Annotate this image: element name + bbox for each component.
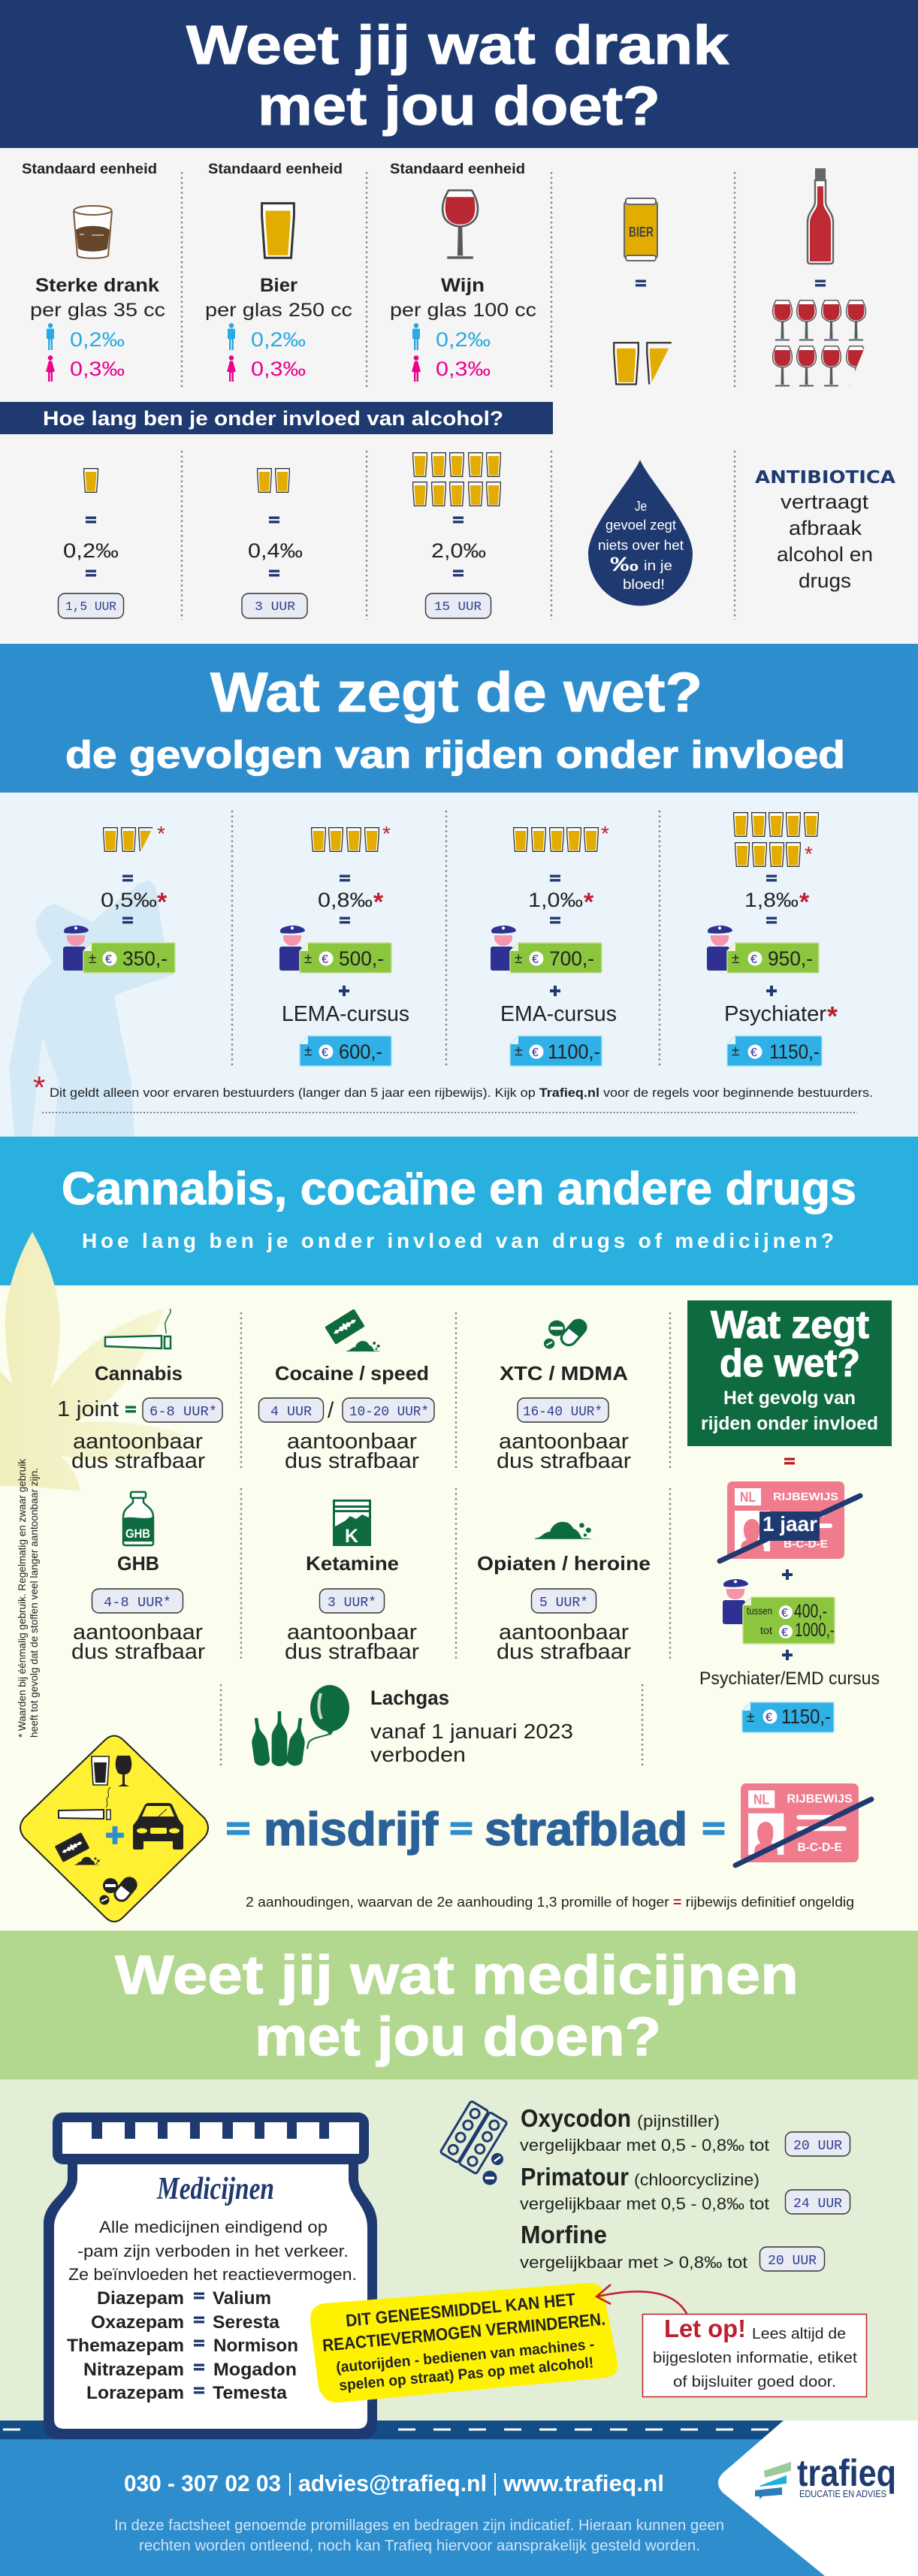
note: rotated footnote: [16, 1458, 40, 1738]
column: wijn: per glas 100 cc: [390, 300, 536, 321]
tag: 1150: ±: [747, 1710, 754, 1726]
arrow: red curved: [596, 2285, 690, 2321]
clock: 3 uur: 3 UUR: [255, 600, 295, 615]
item: ketamine: dus strafbaar: [285, 1640, 419, 1664]
tag: 1100: [510, 1036, 602, 1066]
item: opiaten heroine: dus strafbaar: [497, 1640, 631, 1664]
jar text: Valium: [213, 2288, 271, 2309]
callout: drop: ‰: [610, 553, 639, 575]
clock: 16-40 uur: 16-40 UUR*: [523, 1405, 602, 1420]
footnote: Dit geldt alleen voor ervaren bestuurders (langer dan 5 jaar een rijbewijs). Kijk op Trafieq.nl voor de regels voor beginnende bestuurders.: [50, 1086, 873, 1100]
text: antibiotica: drugs: [799, 569, 851, 592]
icon: shot glass: [74, 206, 112, 258]
footnote: *: [33, 1070, 45, 1105]
icon: woman: [412, 355, 421, 382]
column: 1,0 promille: *: [601, 822, 609, 845]
item: cannabis: dus strafbaar: [71, 1449, 205, 1473]
icon: officer with fine between 400 and 1000: tot: [760, 1624, 772, 1636]
item: xtc mdma: dus strafbaar: [497, 1449, 631, 1473]
panel: cannabis cocaine en andere drugs: [0, 1137, 918, 1931]
column: fles wijn: [773, 168, 865, 386]
icon: joint: [105, 1309, 171, 1348]
item: lachgas: vanaf 1 januari 2023: [370, 1720, 573, 1743]
contact line: 030 - 307 02 03: [124, 2470, 281, 2496]
panel: medicijnen: [0, 1931, 918, 2439]
icon: warning diamond: [20, 1735, 208, 1922]
clock: 24 uur: [786, 2190, 850, 2214]
contact line: [124, 2470, 664, 2496]
clock: 3 uur: [320, 1589, 385, 1613]
item: oxycodon: Oxycodon: [521, 2104, 631, 2132]
column: 1,0 promille: *: [584, 888, 594, 917]
column: bier: 0,3‰: [251, 358, 306, 380]
icon: pills: [544, 1317, 589, 1348]
column: 0,8 promille: LEMA-cursus: [282, 1002, 409, 1026]
column: bier: Bier: [260, 275, 297, 296]
title: cannabis cocaine en andere drugs: Hoe lang ben je onder invloed van drugs of medicijnen?: [82, 1229, 834, 1252]
callout: yellow warning label: (autorijden - bedienen van machines -: [335, 2336, 595, 2376]
item: oxycodon: (pijnstiller): [637, 2112, 720, 2131]
item: xtc mdma: aantoonbaar: [499, 1430, 629, 1454]
item: cocaine speed: dus strafbaar: [285, 1449, 419, 1473]
callout: drop: gevoel zegt: [605, 518, 676, 533]
clock: 3 uur: 3 UUR*: [328, 1596, 376, 1611]
item: primatour: Primatour: [521, 2163, 629, 2191]
tag: 600: ±: [304, 1043, 312, 1059]
tag: 1150: €: [766, 1711, 772, 1724]
clock: 15 uur: [425, 593, 491, 618]
callout: drop: Je: [635, 499, 647, 514]
title: wat zegt de wet: [65, 661, 845, 776]
column: bier: per glas 250 cc: [205, 300, 352, 321]
clock: 4 uur: [258, 1398, 323, 1422]
jar text: Mogadon: [213, 2360, 297, 2380]
tag: 600: €: [322, 1046, 328, 1059]
column: 1,0 promille: EMA-cursus: [500, 1002, 617, 1026]
icon: wine glass: [442, 190, 478, 258]
column: sterke drank: 0,2‰: [70, 328, 125, 351]
icon: officer with fine between 400 and 1000: 400,-: [794, 1601, 827, 1622]
title: weet jij wat drank: Weet jij wat drank: [186, 15, 729, 76]
callout: yellow warning label: [310, 2283, 618, 2402]
tag: 1150: ±: [732, 1043, 739, 1059]
clock: 6-8 uur: 6-8 UUR*: [149, 1405, 217, 1420]
icon: officer with fine 700: ±: [515, 951, 522, 967]
item: opiaten heroine: aantoonbaar: [499, 1620, 629, 1644]
column: 10 biertjes: 2,0‰: [431, 539, 486, 562]
side panel: wat zegt de wet drugs: [687, 1300, 892, 1732]
panel: wat drank met jou doet: [0, 0, 918, 644]
item: primatour: vergelijkbaar met 0,5 - 0,8‰ tot: [520, 2194, 769, 2213]
panel: footer: [0, 2420, 918, 2576]
clock: 16-40 uur: [518, 1398, 608, 1422]
jar text: Nitrazepam: [83, 2360, 184, 2380]
disclaimer: [114, 2517, 724, 2554]
icon: license revoked 1 jaar: [720, 1481, 860, 1561]
tag: 1100: ±: [515, 1043, 522, 1059]
logo: trafieq: [755, 2452, 896, 2499]
title: weet jij wat drank: met jou doet?: [258, 76, 660, 137]
column: wijn: 0,2‰: [436, 328, 491, 351]
callout: drop: niets over het: [598, 538, 684, 553]
clock: 4 uur: 4 UUR: [270, 1405, 312, 1420]
icon: man: [228, 323, 235, 350]
tag: 1150: 1150,-: [781, 1705, 831, 1728]
heading: medicijnen: Medicijnen: [156, 2172, 274, 2206]
jar text: [67, 2218, 357, 2403]
icon: officer with fine 700: 700,-: [549, 947, 594, 970]
title: weet jij wat medicijnen: Weet jij wat medicijnen: [115, 1945, 799, 2006]
title: weet jij wat medicijnen: [115, 1945, 799, 2067]
column: 1,8 promille: *: [805, 842, 813, 865]
column: 0,5 promille: 0,5‰: [101, 889, 157, 911]
icon: wine bottle: [808, 168, 833, 264]
item: ketamine: aantoonbaar: [287, 1620, 417, 1644]
column: 1,0 promille: [491, 822, 617, 1066]
box: green heading: Wat zegt: [711, 1303, 869, 1347]
icon: officer with fine 950: ±: [732, 951, 739, 967]
jar text: Temesta: [213, 2383, 288, 2403]
item: oxycodon: [520, 2104, 850, 2156]
clock: 5 uur: [532, 1589, 596, 1613]
item: morfine: Morfine: [521, 2221, 607, 2248]
icon: ketamine bag: [333, 1499, 371, 1547]
column: 0,5 promille: *: [157, 888, 168, 917]
column: 0,8 promille: *: [373, 888, 384, 917]
clock: 1,5 uur: [59, 593, 123, 618]
icon: officer with fine 500: ±: [304, 951, 312, 967]
disclaimer: In deze factsheet genoemde promillages en bedragen zijn indicatief. Hieraan kunnen geen: [114, 2517, 724, 2534]
icon: officer with fine 700: [491, 926, 602, 973]
column: wijn: Wijn: [441, 275, 485, 296]
icon: wine glasses grid: [773, 300, 865, 386]
column: 2 biertjes: [242, 469, 307, 618]
column: 0,8 promille: 0,8‰: [318, 889, 373, 911]
callout: drop: bloed!: [623, 577, 665, 592]
item: opiaten heroine: [477, 1522, 651, 1664]
callout: yellow warning label: DIT GENEESMIDDEL KAN HET: [345, 2289, 576, 2330]
title: weet jij wat medicijnen: met jou doen?: [255, 2007, 661, 2067]
callout: drop: [588, 460, 693, 605]
item: lachgas: verboden: [370, 1743, 466, 1766]
icon: officer with fine 500: €: [322, 953, 328, 966]
box: green heading: de wet?: [720, 1342, 860, 1385]
icon: beer glass: [262, 204, 294, 258]
icon: woman: [46, 355, 55, 382]
title: cannabis cocaine en andere drugs: Cannabis, cocaïne en andere drugs: [62, 1163, 856, 1214]
note: rotated footnote: * Waarden bij éénmalig gebruik. Regelmatig en zwaar gebruik: [16, 1458, 28, 1738]
side panel: wat zegt de wet drugs: Psychiater/EMD cursus: [699, 1669, 880, 1689]
banner: hoe lang onder invloed van alcohol: [0, 402, 553, 434]
item: cocaine speed: aantoonbaar: [287, 1430, 417, 1454]
callout: yellow warning label: spelen op straat) Pas op met alcohol!: [338, 2354, 594, 2394]
icon: man: [412, 323, 420, 350]
item: primatour: (chloorcyclizine): [634, 2170, 759, 2189]
tag: 1150: [742, 1702, 834, 1732]
icon: officer with fine 350: €: [105, 953, 112, 966]
tag: 1150: [727, 1036, 822, 1066]
icon: ghb bottle: GHB: [125, 1527, 150, 1541]
box: green heading: rijden onder invloed: [701, 1413, 878, 1434]
item: ketamine: Ketamine: [306, 1552, 399, 1575]
item: ghb: [71, 1492, 205, 1664]
jar text: Ze beïnvloeden het reactievermogen.: [68, 2265, 357, 2284]
panel: wat zegt de wet: [0, 644, 918, 1137]
icon: officer with fine 950: [707, 926, 819, 973]
callout: let op: bijgesloten informatie, etiket: [653, 2350, 857, 2366]
icon: woman: [227, 355, 236, 382]
item: cocaine speed: Cocaine / speed: [275, 1362, 429, 1385]
icon: officer with fine between 400 and 1000: €: [781, 1607, 788, 1620]
column: bier: 0,2‰: [251, 328, 306, 351]
item: morfine: vergelijkbaar met > 0,8‰ tot: [520, 2253, 747, 2272]
item: xtc mdma: [497, 1317, 631, 1473]
icon: officer with fine 350: 350,-: [122, 947, 168, 970]
item: ghb: dus strafbaar: [71, 1640, 205, 1664]
item: cannabis: Cannabis: [95, 1362, 183, 1385]
contact line: www.trafieq.nl: [503, 2470, 664, 2496]
text: antibiotica: alcohol en: [777, 543, 873, 566]
jar text: Oxazepam: [91, 2312, 184, 2333]
item: lachgas: Lachgas: [370, 1687, 449, 1709]
icon: cannabis leaf background: [0, 1232, 186, 1491]
statement: misdrijf strafblad: strafblad: [485, 1804, 687, 1856]
icon: ghb bottle: [123, 1492, 153, 1545]
column: blikje bier: [614, 198, 672, 385]
callout: let op: [643, 2314, 867, 2396]
silhouette: drinking person: [9, 880, 174, 1137]
clock: 10-20 uur: [343, 1398, 434, 1422]
clock: 20 uur: [786, 2132, 850, 2156]
clock: 5 uur: 5 UUR*: [539, 1596, 588, 1611]
column: 1,8 promille: [707, 813, 838, 1066]
icon: razor and powder: [325, 1309, 380, 1351]
column: bier: Standaard eenheid: [208, 162, 343, 177]
tag: 1100: €: [532, 1046, 539, 1059]
banner: hoe lang onder invloed van alcohol: Hoe lang ben je onder invloed van alcohol?: [43, 407, 503, 430]
contact line: advies@trafieq.nl: [298, 2470, 487, 2496]
icon: gas cylinders and balloon: [249, 1685, 349, 1767]
icon: officer with fine between 400 and 1000: 1000,-: [795, 1620, 835, 1641]
statement: misdrijf strafblad: misdrijf: [264, 1804, 438, 1856]
column: 0,5 promille: [63, 822, 175, 973]
column: 10 biertjes: [413, 453, 500, 618]
item: xtc mdma: XTC / MDMA: [500, 1362, 628, 1385]
column: 1,8 promille: *: [827, 1001, 838, 1031]
column: wijn: 0,3‰: [436, 358, 491, 380]
icon: license crossed out: [735, 1783, 871, 1865]
jar text: -pam zijn verboden in het verkeer.: [77, 2242, 349, 2260]
white logo area: [718, 2420, 918, 2576]
column: wijn: [390, 162, 536, 382]
logo: trafieq: trafieq: [797, 2452, 896, 2494]
column: bier: [205, 162, 352, 382]
column: 1,8 promille: *: [799, 888, 810, 917]
jar text: Seresta: [213, 2312, 280, 2333]
jar text: Alle medicijnen eindigend op: [99, 2218, 328, 2236]
box: green heading: Het gevolg van: [723, 1388, 856, 1409]
column: 1,8 promille: 1,8‰: [744, 889, 799, 911]
icon: beer can: BIER: [629, 225, 654, 240]
tag: 1150: €: [750, 1046, 757, 1059]
column: wijn: Standaard eenheid: [390, 162, 525, 177]
clock: 6-8 uur: [143, 1398, 222, 1422]
text: antibiotica: vertraagt: [781, 491, 869, 513]
icon: officer with fine between 400 and 1000: [723, 1579, 835, 1644]
tag: 600: 600,-: [339, 1040, 382, 1063]
column: 2 biertjes: 0,4‰: [248, 539, 303, 562]
clock: 4-8 uur: [92, 1589, 183, 1613]
footnote: [33, 1070, 873, 1105]
clock: 4-8 uur: 4-8 UUR*: [104, 1596, 171, 1611]
clock: 10-20 uur: 10-20 UUR*: [349, 1405, 429, 1420]
column: 1,8 promille: Psychiater: [724, 1002, 826, 1026]
item: primatour: [520, 2163, 850, 2214]
item: cocaine speed: /: [328, 1398, 334, 1423]
clock: 20 uur: [760, 2247, 825, 2271]
callout: let op: of bijsluiter goed door.: [673, 2374, 836, 2390]
column: sterke drank: 0,3‰: [70, 358, 125, 380]
icon: officer with fine 350: [63, 926, 175, 973]
item: cocaine speed: [258, 1309, 434, 1473]
icon: ketamine bag: K: [345, 1526, 358, 1547]
box: green heading: [687, 1300, 892, 1446]
statement: misdrijf strafblad: [227, 1804, 724, 1856]
column: 1 biertje: [59, 469, 123, 618]
item: morfine: [520, 2221, 825, 2272]
icon: officer with fine 700: €: [532, 953, 539, 966]
clock: 1,5 uur: 1,5 UUR: [65, 600, 116, 615]
callout: let op: Lees altijd de: [752, 2326, 846, 2342]
column: sterke drank: Standaard eenheid: [22, 162, 157, 177]
icon: officer with fine 500: 500,-: [339, 947, 384, 970]
column: sterke drank: Sterke drank: [35, 275, 159, 296]
title: cannabis cocaine en andere drugs: [62, 1163, 856, 1252]
item: lachgas: [249, 1685, 573, 1767]
clock: 24 uur: 24 UUR: [793, 2197, 842, 2212]
text: antibiotica: [755, 468, 895, 592]
tag: 1100: 1100,-: [548, 1040, 600, 1063]
item: cannabis: aantoonbaar: [73, 1430, 203, 1454]
tag: 600: [300, 1036, 391, 1066]
icon: officer with fine between 400 and 1000: €: [781, 1626, 788, 1639]
jar text: Themazepam: [67, 2336, 184, 2356]
item: ghb: aantoonbaar: [73, 1620, 203, 1644]
clock: 3 uur: [242, 593, 307, 618]
clock: 20 uur: 20 UUR: [768, 2254, 817, 2269]
title: wat zegt de wet: de gevolgen van rijden onder invloed: [65, 733, 845, 776]
column: 0,8 promille: [279, 822, 409, 1066]
equals: [815, 279, 826, 287]
clock: 20 uur: 20 UUR: [793, 2139, 842, 2154]
icon: license revoked 1 jaar: 1 jaar: [762, 1512, 817, 1536]
item: ghb: GHB: [117, 1552, 159, 1575]
jar text: Lorazepam: [86, 2383, 184, 2403]
icon: officer with fine 950: €: [750, 953, 757, 966]
icon: beer can: [624, 198, 657, 261]
text: antibiotica: ANTIBIOTICA: [755, 468, 895, 488]
clock: 15 uur: 15 UUR: [434, 600, 482, 615]
column: sterke drank: [22, 162, 165, 382]
logo: trafieq: EDUCATIE EN ADVIES: [799, 2488, 886, 2499]
tag: 1150: 1150,-: [769, 1040, 820, 1063]
callout: let op: Let op!: [664, 2315, 746, 2342]
icon: officer with fine 950: 950,-: [768, 947, 813, 970]
note: rotated footnote: heeft tot gevolg dat de stoffen veel langer aantoonbaar zijn.: [28, 1468, 40, 1738]
icon: one and a half beers: [614, 343, 672, 385]
jar text: Diazepam: [97, 2288, 184, 2309]
icon: medicine jar: [44, 2112, 377, 2439]
column: sterke drank: per glas 35 cc: [30, 300, 165, 321]
title: wat zegt de wet: Wat zegt de wet?: [210, 661, 702, 723]
column: 1 biertje: 0,2‰: [63, 539, 119, 562]
item: ketamine: [285, 1499, 419, 1664]
item: cannabis: 1 joint: [57, 1397, 119, 1421]
equals: [636, 279, 646, 287]
icon: officer with fine 350: ±: [89, 951, 96, 967]
column: 0,8 promille: *: [382, 822, 391, 845]
icon: powder pile: [535, 1522, 592, 1539]
item: oxycodon: vergelijkbaar met 0,5 - 0,8‰ tot: [520, 2136, 769, 2155]
text: antibiotica: afbraak: [789, 517, 862, 539]
icon: blister packs: [440, 2100, 507, 2185]
disclaimer: rechten worden ontleend, noch kan Trafieq hiervoor aansprakelijk gesteld worden.: [139, 2538, 700, 2554]
column: 1,0 promille: 1,0‰: [528, 889, 583, 911]
title: weet jij wat drank: [186, 15, 729, 137]
jar text: Normison: [213, 2336, 298, 2356]
item: cannabis: [57, 1309, 222, 1473]
callout: drop: in je: [644, 558, 672, 573]
callout: yellow warning label: REACTIEVERMOGEN VERMINDEREN.: [322, 2309, 606, 2355]
note: twee aanhoudingen: 2 aanhoudingen, waarvan de 2e aanhouding 1,3 promille of hoger = rijbewijs definitief ongeldig: [246, 1895, 854, 1910]
item: opiaten heroine: Opiaten / heroine: [477, 1552, 651, 1575]
icon: man: [47, 323, 54, 350]
column: 0,5 promille: *: [157, 822, 165, 845]
icon: officer with fine between 400 and 1000: tussen: [747, 1605, 772, 1617]
icon: officer with fine 500: [279, 926, 391, 973]
